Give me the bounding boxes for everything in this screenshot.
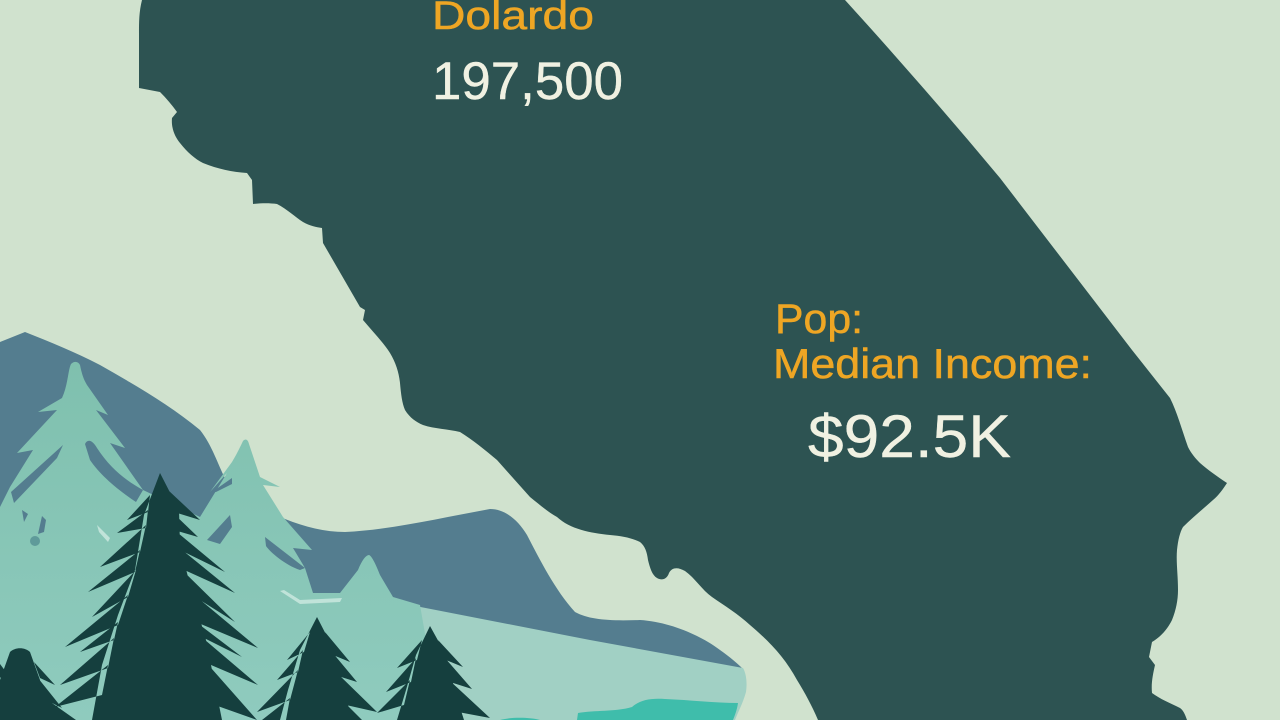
dark pine tree: small left bbox=[0, 648, 76, 720]
turquoise water bbox=[500, 699, 738, 720]
stat: median income value: $92.5K bbox=[808, 403, 1011, 470]
pale highlights bbox=[97, 525, 342, 604]
dark pine tree: centre right bbox=[257, 617, 377, 720]
dark pine tree: large centre bbox=[55, 473, 258, 720]
pale lake bbox=[400, 603, 747, 720]
stat: population value: 197,500 bbox=[432, 52, 623, 111]
tree shadow dot bbox=[30, 536, 40, 546]
label: pop: Pop: bbox=[775, 295, 863, 342]
dark pine tree: right bbox=[377, 626, 490, 720]
pale pine trees bbox=[0, 362, 440, 720]
label: median income: Median Income: bbox=[773, 340, 1092, 387]
distant mountains bbox=[0, 332, 743, 669]
illustration: mountain and forest landscape bbox=[0, 332, 747, 720]
tree shadow strokes bbox=[11, 441, 305, 570]
